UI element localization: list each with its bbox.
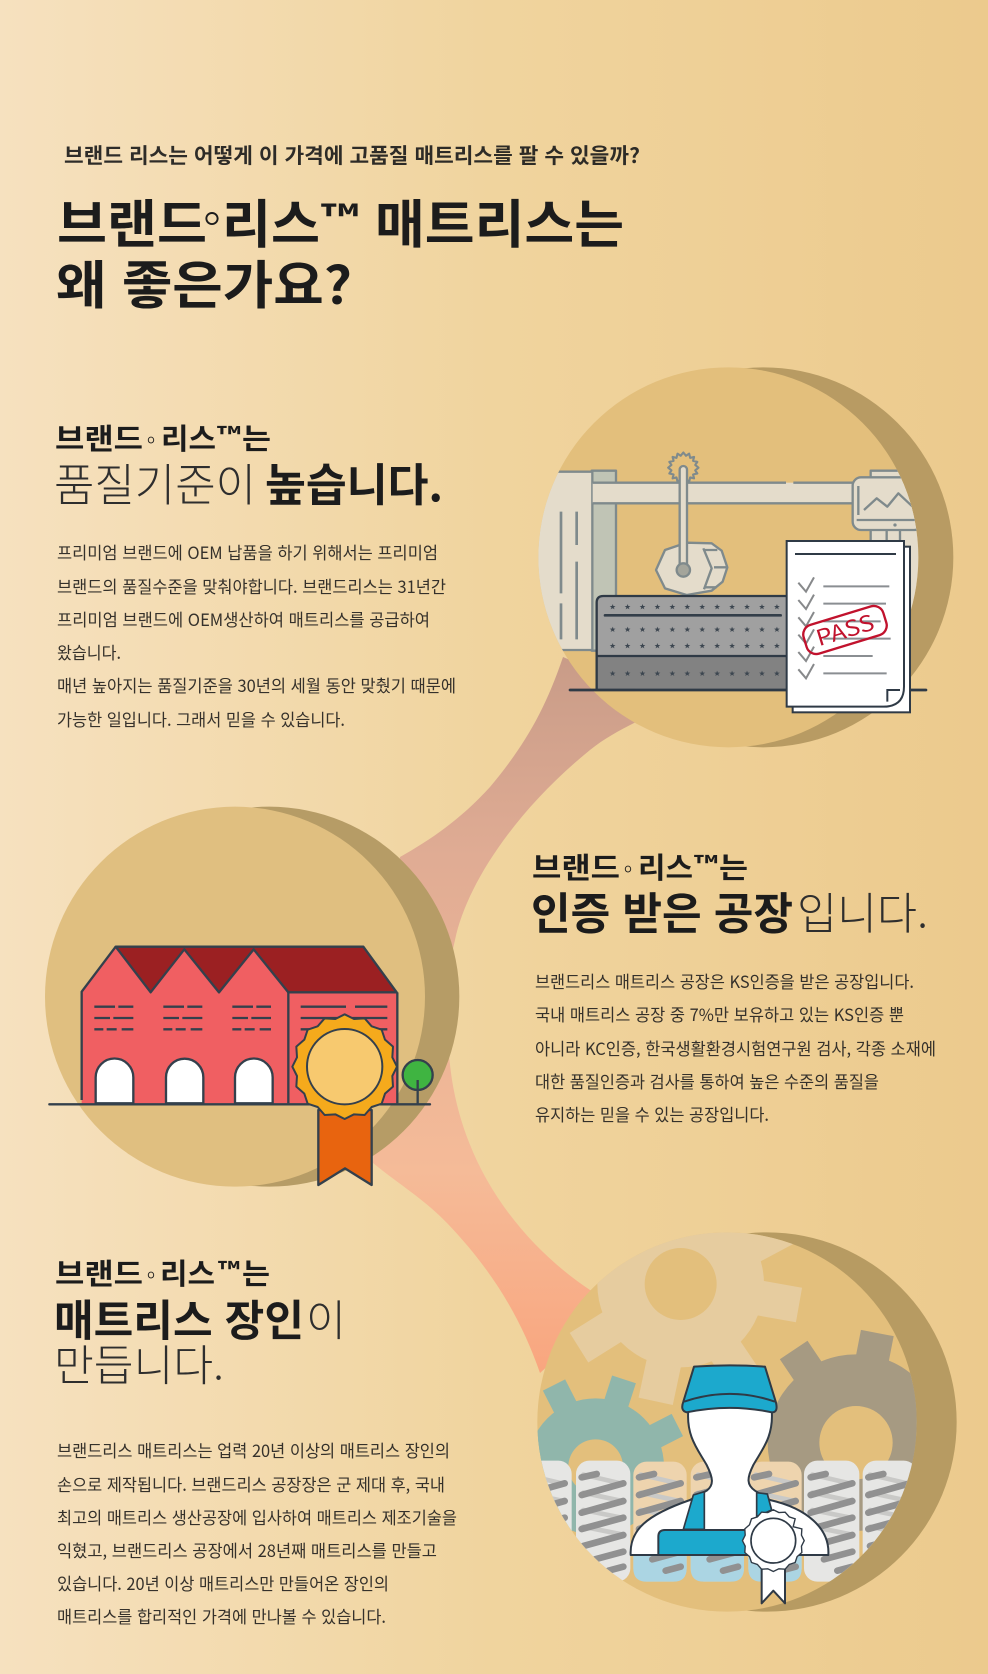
- title: 왜 좋은가요?: [56, 244, 352, 319]
- subtitle: 브랜드 리스는 어떻게 이 가격에 고품질 매트리스를 팔 수 있을까?: [64, 140, 640, 170]
- section 1 heading: ◦: [140, 425, 162, 455]
- gears and springs: [538, 1232, 917, 1582]
- factory building: [82, 947, 397, 1103]
- circle backdrop: [538, 367, 953, 747]
- section 1 heading: 리스: [161, 416, 216, 458]
- tree: [403, 1060, 433, 1104]
- section 2 heading: 는: [719, 845, 748, 887]
- connector ribbon between circles: [373, 657, 640, 1373]
- section 3 body text: 손으로 제작됩니다. 브랜드리스 공장장은 군 제대 후, 국내: [57, 1471, 445, 1496]
- section 2 heading: ™: [694, 846, 718, 880]
- title: [56, 183, 624, 319]
- mattress: [597, 596, 793, 690]
- title: 매트리스는: [375, 183, 624, 258]
- section 2 body text: 대한 품질인증과 검사를 통하여 높은 수준의 품질을: [535, 1068, 879, 1093]
- section 1 heading: ™: [217, 416, 241, 452]
- section 2 body text: 국내 매트리스 공장 중 7%만 보유하고 있는 KS인증 뿐: [535, 1001, 904, 1026]
- section 1 body text: 브랜드의 품질수준을 맞춰야합니다. 브랜드리스는 31년간: [57, 573, 446, 598]
- illustration: mattress craftsman: [537, 1232, 957, 1612]
- title: 리스: [222, 183, 320, 258]
- section 3 body text: 익혔고, 브랜드리스 공장에서 28년째 매트리스를 만들고: [57, 1537, 437, 1562]
- section 3 heading: [54, 1251, 346, 1394]
- section 2 heading: 입니다.: [797, 878, 928, 942]
- certification seal: [292, 1014, 397, 1119]
- circle backdrop: [537, 1232, 957, 1612]
- section 1 body text: 프리미엄 브랜드에 OEM생산하여 매트리스를 공급하여: [57, 606, 430, 631]
- section 2 body text: 아니라 KC인증, 한국생활환경시험연구원 검사, 각종 소재에: [535, 1035, 936, 1060]
- section 2 heading: 리스: [638, 845, 693, 887]
- title: ™: [321, 190, 359, 242]
- section 3 body text: 매트리스를 합리적인 가격에 만나볼 수 있습니다.: [57, 1603, 386, 1628]
- section 3 heading: 만듭니다.: [54, 1332, 224, 1394]
- section 3 heading: 는: [242, 1251, 270, 1293]
- circle backdrop: [45, 807, 459, 1187]
- section 3 heading: 매트리스 장인: [54, 1287, 304, 1349]
- section 1 heading: 브랜드: [55, 416, 143, 458]
- section 2 heading: 인증 받은 공장: [531, 878, 793, 942]
- title: ◦: [190, 184, 234, 248]
- section 1 heading: 는: [242, 416, 271, 458]
- pocket springs: [517, 1461, 917, 1582]
- section 3 body text: [57, 1437, 457, 1628]
- section 3 heading: 리스: [160, 1251, 215, 1293]
- title: 브랜드: [57, 183, 207, 258]
- section 1 body text: 매년 높아지는 품질기준을 30년의 세월 동안 맞췄기 때문에: [57, 672, 456, 697]
- section 1 body text: 왔습니다.: [57, 639, 121, 664]
- ground line: [570, 686, 926, 694]
- section 3 heading: 브랜드: [55, 1251, 143, 1293]
- badge: [742, 1510, 804, 1603]
- testing machine: [537, 452, 923, 651]
- section 2 body text: [535, 968, 936, 1126]
- PASS stamp: PASS: [812, 605, 878, 653]
- worker figure: [631, 1365, 828, 1555]
- section 1 body text: 프리미엄 브랜드에 OEM 납품을 하기 위해서는 프리미엄: [57, 539, 438, 564]
- section 2 heading: 브랜드: [532, 845, 620, 887]
- section 3 body text: 있습니다. 20년 이상 매트리스만 만들어온 장인의: [57, 1570, 389, 1595]
- PASS stamp: [800, 602, 889, 657]
- section 2 body text: 브랜드리스 매트리스 공장은 KS인증을 받은 공장입니다.: [535, 968, 914, 993]
- ground line: [49, 1101, 430, 1108]
- section 1 heading: 높습니다.: [265, 449, 443, 514]
- section 3 heading: ™: [218, 1252, 240, 1286]
- section 3 heading: ◦: [140, 1260, 162, 1290]
- checklist document: [787, 541, 910, 712]
- section 2 body text: 유지하는 믿을 수 있는 공장입니다.: [535, 1101, 769, 1126]
- ribbon: [318, 1110, 372, 1185]
- section 1 heading: [54, 416, 443, 514]
- section 2 heading: [531, 845, 928, 942]
- section 1 body text: 가능한 일입니다. 그래서 믿을 수 있습니다.: [57, 706, 345, 731]
- illustration: certified factory: [45, 807, 459, 1187]
- grey gear: [767, 1330, 917, 1531]
- illustration: machine test with PASS document: [537, 367, 953, 747]
- section 3 heading: 이: [306, 1287, 346, 1349]
- section 1 heading: 품질기준이: [54, 449, 256, 514]
- beige gear: [570, 1232, 802, 1405]
- section 3 body text: 최고의 매트리스 생산공장에 입사하여 매트리스 제조기술을: [57, 1504, 457, 1529]
- teal gear: [538, 1376, 687, 1532]
- section 2 heading: ◦: [618, 854, 638, 884]
- section 1 body text: [57, 539, 456, 731]
- section 3 body text: 브랜드리스 매트리스는 업력 20년 이상의 매트리스 장인의: [57, 1437, 450, 1462]
